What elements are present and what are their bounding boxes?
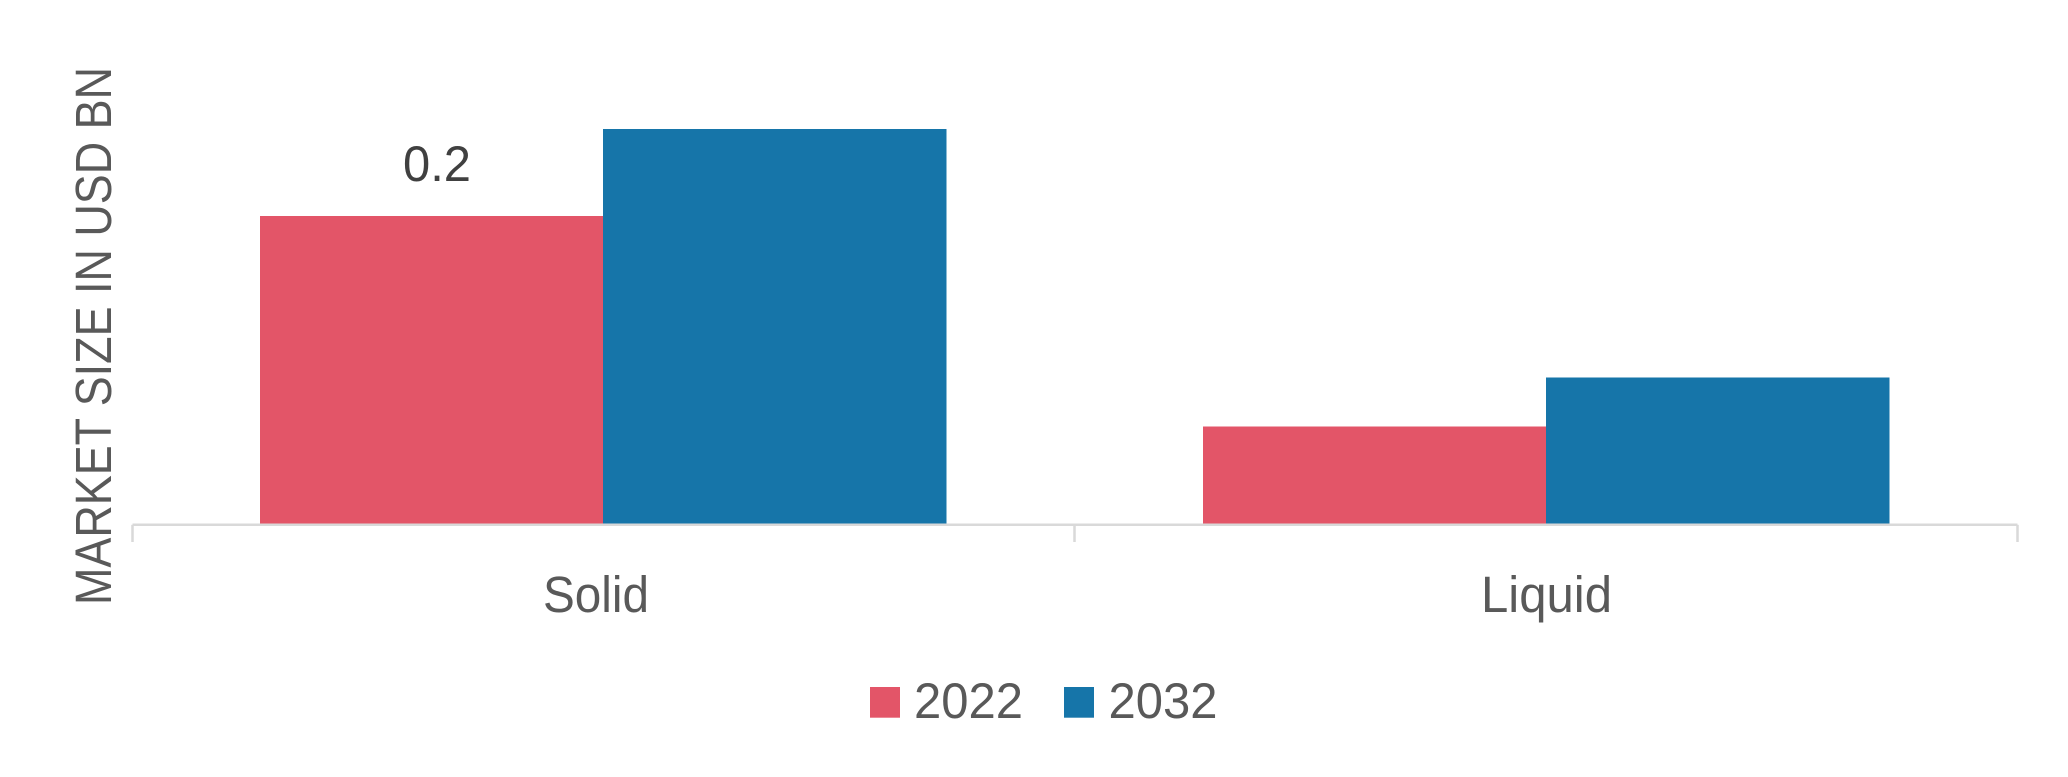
data label: 0.2: 0.2 [403,136,471,192]
bar: Liquid 2032 [1546,378,1890,524]
bar: Liquid 2022 [1203,426,1546,524]
x axis line and ticks [132,525,2018,542]
category label: Solid: Solid [543,566,649,623]
legend swatch: 2032 [1064,687,1094,718]
legend label: 2032: 2032 [1108,673,1218,729]
bar: Solid 2032 [603,129,946,524]
legend swatch: 2022 [870,687,900,718]
legend [870,673,1218,729]
y axis title: MARKET SIZE IN USD BN [65,67,122,605]
category label: Liquid: Liquid [1481,566,1612,623]
bar: Solid 2022 [260,216,603,524]
legend label: 2022: 2022 [914,673,1023,729]
